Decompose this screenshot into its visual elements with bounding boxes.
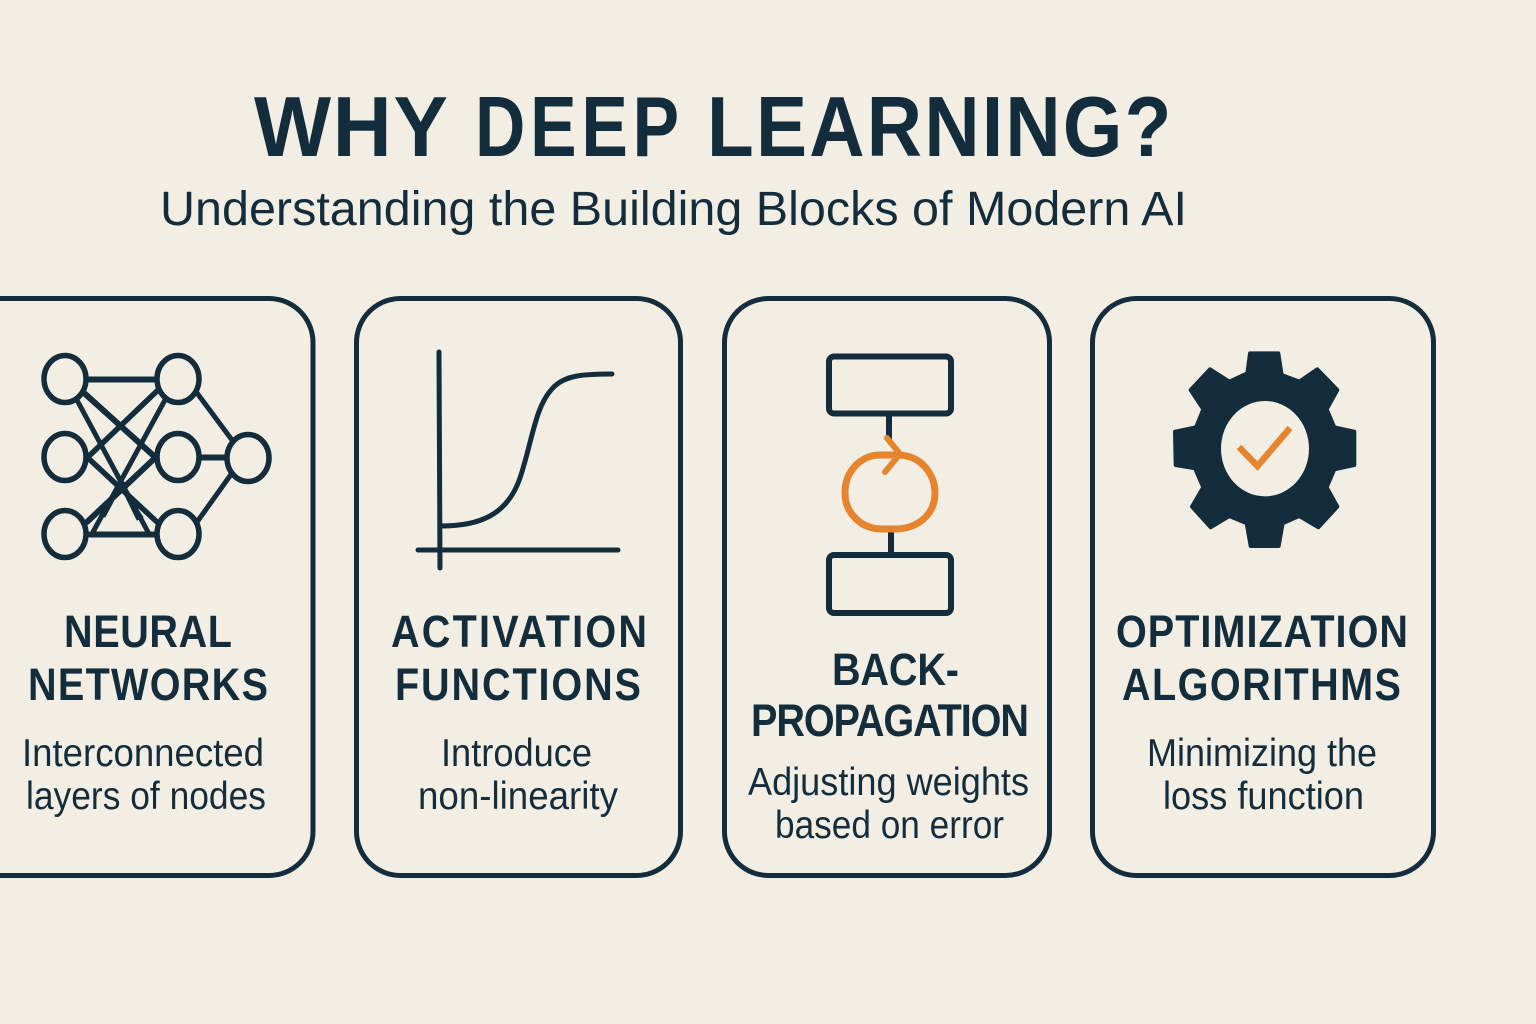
panel: backpropagation — [724, 298, 1050, 876]
description: neural networks — [22, 732, 266, 818]
title: DEEP — [475, 81, 679, 175]
heading: activation functions: FUNCTIONS — [395, 660, 641, 710]
description: optimization algorithms — [1147, 732, 1377, 818]
card outline: activation functions — [356, 298, 680, 876]
heading: neural networks — [28, 607, 268, 710]
panel: neural networks — [0, 298, 313, 876]
card outline: optimization algorithms — [1092, 298, 1434, 876]
icon: backpropagation loop — [829, 356, 951, 613]
heading: optimization algorithms: ALGORITHMS — [1122, 660, 1401, 710]
description: backpropagation — [748, 761, 1029, 847]
heading: activation functions: ACTIVATION — [391, 607, 647, 657]
subtitle: Understanding the Building Blocks of Modern AI — [160, 183, 1187, 236]
heading: activation functions — [391, 607, 647, 710]
description: activation functions: non-linearity — [418, 775, 618, 818]
icon: activation curve — [418, 352, 618, 568]
icon: gear with check — [1175, 353, 1354, 546]
panel: activation functions — [356, 298, 680, 876]
heading: neural networks: NETWORKS — [28, 660, 268, 710]
heading: backpropagation: PROPAGATION — [751, 696, 1029, 746]
description: activation functions: Introduce — [441, 732, 592, 775]
title — [254, 79, 1171, 175]
description: neural networks: Interconnected — [22, 732, 264, 775]
icon: neural network — [44, 356, 269, 558]
description: neural networks: layers of nodes — [26, 775, 266, 818]
heading: optimization algorithms — [1116, 607, 1408, 710]
panel: optimization algorithms — [1092, 298, 1434, 876]
description: backpropagation: Adjusting weights — [748, 761, 1029, 804]
heading: backpropagation: BACK- — [832, 645, 959, 695]
card outline: neural networks — [0, 298, 313, 876]
description: optimization algorithms: Minimizing the — [1147, 732, 1377, 775]
heading: optimization algorithms: OPTIMIZATION — [1116, 607, 1408, 657]
title: WHY — [254, 79, 448, 174]
description: activation functions — [418, 732, 618, 818]
description: backpropagation: based on error — [775, 804, 1004, 847]
title: LEARNING? — [707, 80, 1171, 175]
description: optimization algorithms: loss function — [1163, 775, 1364, 818]
heading: neural networks: NEURAL — [64, 607, 232, 657]
card outline: backpropagation — [724, 298, 1050, 876]
heading: backpropagation — [751, 645, 1029, 746]
